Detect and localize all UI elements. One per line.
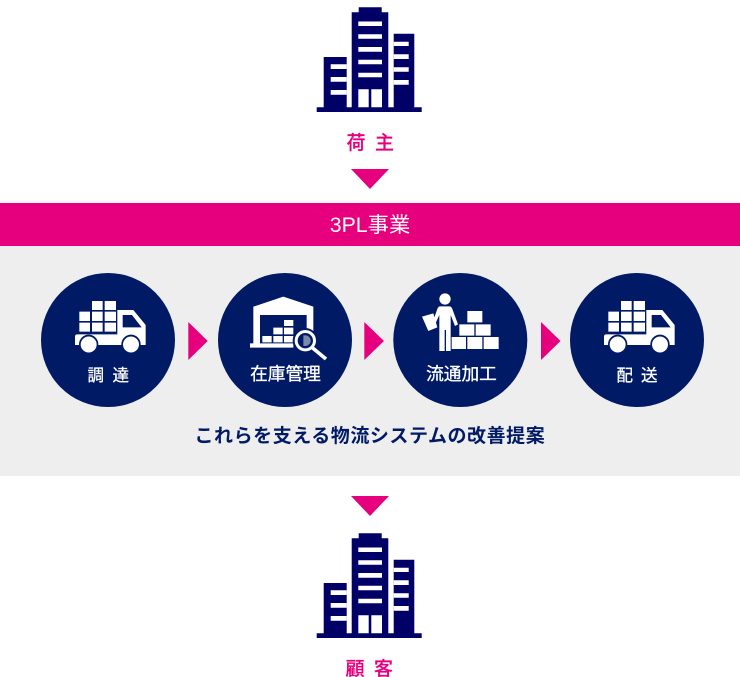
caption: system improvement: これらを支える物流システムの改善提案 (194, 425, 545, 447)
icon: truck (75, 301, 146, 354)
label: procurement: 調達 (88, 366, 129, 385)
step: delivery (570, 273, 704, 407)
bottom building icon: customer (317, 533, 422, 638)
label: delivery: 配送 (616, 366, 658, 385)
arrow: step 3 to 4 (541, 322, 560, 360)
heading: 3PL: 3PL事業 (330, 213, 410, 237)
step: distribution processing (393, 273, 527, 407)
label: inventory management: 在庫管理 (250, 364, 321, 384)
icon: worker with boxes (422, 293, 499, 351)
arrow: 3PL to customer (351, 496, 389, 516)
panel: 3PL header band (0, 203, 740, 246)
step: procurement (41, 273, 175, 407)
label: shipper: 荷主 (346, 132, 394, 154)
panel: logistics process (0, 246, 740, 476)
arrow: step 1 to 2 (188, 322, 208, 360)
top building icon: shipper (317, 7, 422, 112)
icon: warehouse with magnifier (250, 297, 326, 359)
label: distribution processing: 流通加工 (426, 364, 497, 384)
arrow: shipper to 3PL (351, 169, 389, 189)
step: inventory management (218, 273, 352, 407)
arrow: step 2 to 3 (364, 322, 384, 360)
icon: truck (604, 301, 675, 354)
